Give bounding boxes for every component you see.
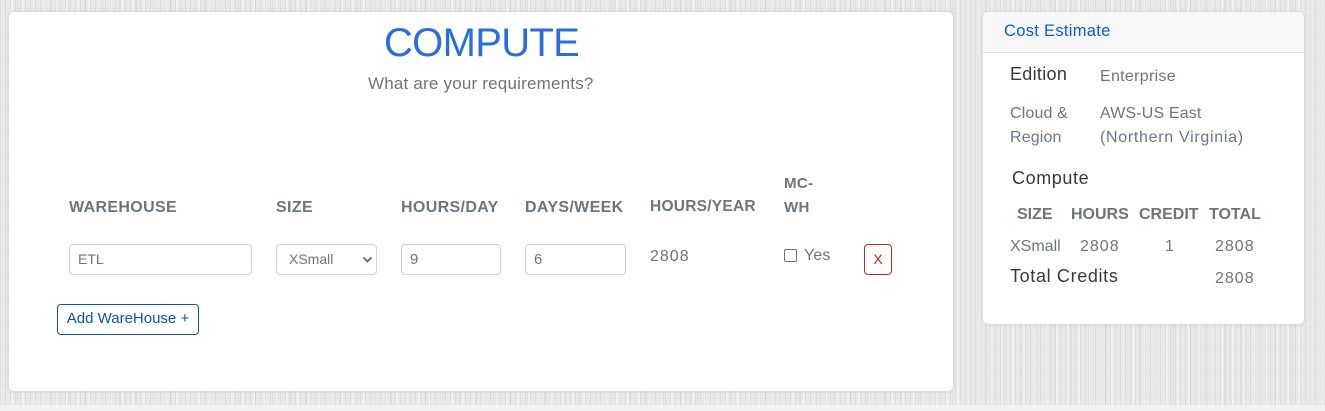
cell: hours: 2808 (1080, 238, 1120, 255)
cell: credit: 1 (1165, 238, 1174, 255)
button: add warehouse (57, 304, 199, 335)
value: cloud and region: AWS-US East (1100, 105, 1202, 122)
header: hours per year: HOURS/YEAR (650, 198, 756, 215)
label: total credits: Total Credits (1010, 266, 1118, 286)
subtitle: What are your requirements? (368, 74, 594, 93)
column: size: SIZE (1017, 206, 1053, 223)
summary table (1010, 206, 1261, 287)
select: size: XSmall (289, 251, 333, 267)
label: cloud and region (1010, 105, 1068, 146)
panel: cost estimate (983, 12, 1304, 324)
value: cloud and region: (Northern Virginia) (1100, 129, 1244, 146)
header: multi-cluster warehouse: MC- (784, 175, 813, 192)
value: cloud and region (1100, 105, 1244, 146)
cell: size: XSmall (1010, 238, 1061, 255)
input: hours per day: 9 (410, 251, 418, 268)
value: edition: Enterprise (1100, 68, 1176, 85)
checkbox: multi-cluster yes (784, 247, 831, 264)
table headers (69, 175, 813, 216)
select: size (276, 244, 377, 275)
header: warehouse: WAREHOUSE (69, 199, 177, 216)
label: cloud and region: Cloud & (1010, 105, 1068, 122)
title: compute: COMPUTE (384, 21, 579, 65)
input: warehouse name (69, 244, 252, 275)
checkbox label: Yes (804, 247, 831, 264)
label: cloud and region: Region (1010, 129, 1062, 146)
button: remove row: X (873, 251, 883, 267)
heading: cost estimate: Cost Estimate (1004, 22, 1111, 40)
value: total credits: 2808 (1215, 270, 1255, 287)
heading: compute: Compute (1012, 168, 1089, 188)
panel: compute (9, 12, 953, 391)
input: days per week (525, 244, 626, 275)
header: multi-cluster warehouse: WH (784, 199, 810, 216)
column: total: TOTAL (1209, 206, 1261, 223)
input: warehouse name: ETL (78, 251, 104, 267)
cell: total: 2808 (1215, 238, 1255, 255)
icon: dropdown chevron (362, 256, 372, 263)
button: remove row (864, 244, 892, 275)
header: size: SIZE (276, 199, 313, 216)
value: hours per year: 2808 (650, 248, 690, 265)
panel header (983, 12, 1304, 53)
label: edition: Edition (1010, 64, 1067, 84)
checkbox box (784, 249, 797, 262)
column: credit: CREDIT (1139, 206, 1199, 223)
input: days per week: 6 (534, 251, 542, 268)
input: hours per day (401, 244, 501, 275)
header: hours per day: HOURS/DAY (401, 199, 499, 216)
button: add warehouse: Add WareHouse + (67, 310, 189, 327)
header: days per week: DAYS/WEEK (525, 199, 624, 216)
header: multi-cluster warehouse (784, 175, 813, 216)
column: hours: HOURS (1071, 206, 1129, 223)
